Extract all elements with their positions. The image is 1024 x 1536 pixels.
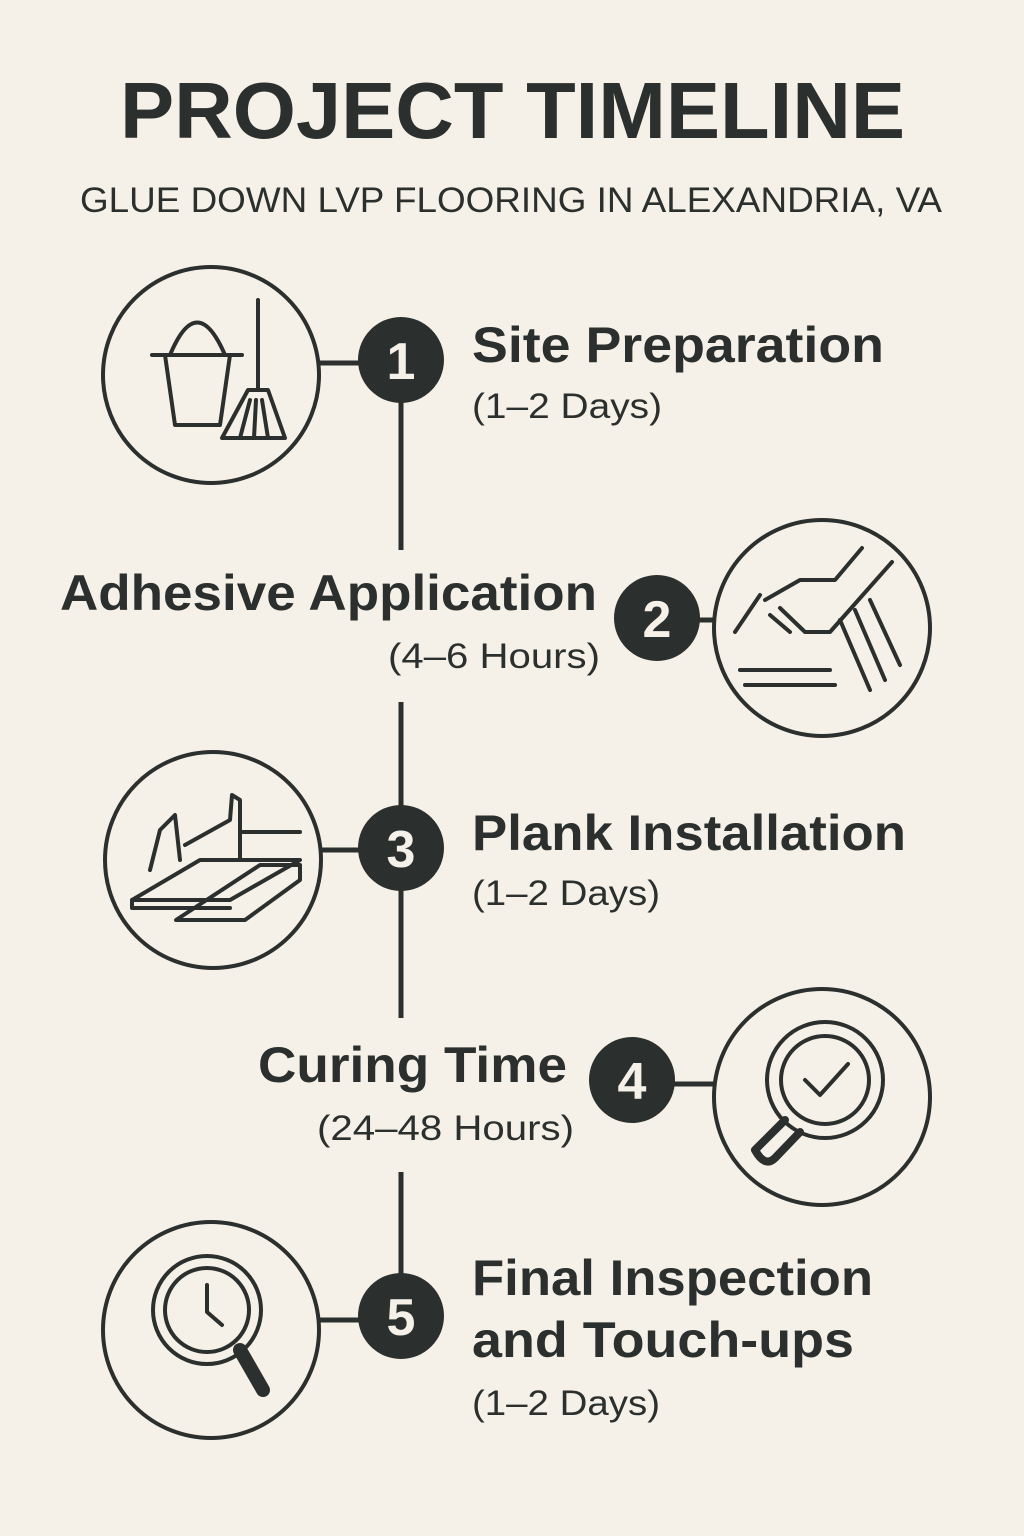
icon: magnifier with check — [714, 989, 930, 1205]
number badge 2 — [614, 575, 700, 661]
icon: plank installation — [105, 752, 321, 968]
step 5 text: (1–2 Days) — [472, 1384, 660, 1423]
number badge 4: 4 — [618, 1053, 647, 1111]
step 2 text: Adhesive Application — [60, 565, 597, 621]
number badge 4 — [589, 1037, 675, 1123]
step 5 text: and Touch-ups — [472, 1312, 854, 1368]
step 1 — [103, 267, 884, 483]
step 3 text: Plank Installation — [472, 805, 906, 861]
step 1 text: (1–2 Days) — [472, 387, 662, 426]
step 3 text: (1–2 Days) — [472, 874, 660, 913]
title: PROJECT TIMELINE — [120, 66, 905, 155]
step 5 text — [472, 1250, 873, 1423]
number badge 3: 3 — [387, 821, 415, 879]
number badge 3 — [358, 805, 444, 891]
step 3 — [105, 752, 906, 968]
number badge 1: 1 — [387, 333, 415, 391]
number badge 1 — [358, 317, 444, 403]
number badge 5 — [358, 1273, 444, 1359]
step 5 text: Final Inspection — [472, 1250, 873, 1306]
step 1 text: Site Preparation — [472, 317, 884, 373]
icon: hand spreading adhesive — [714, 520, 930, 736]
number badge 5: 5 — [387, 1289, 415, 1347]
step 2 — [60, 520, 930, 736]
number badge 2: 2 — [643, 591, 671, 649]
icon: magnifier with clock — [103, 1222, 319, 1438]
step 4 text: Curing Time — [258, 1037, 567, 1093]
step 4 text — [258, 1037, 574, 1148]
step 2 text — [60, 565, 600, 676]
step 1 text — [472, 317, 884, 426]
subtitle: GLUE DOWN LVP FLOORING IN ALEXANDRIA, VA — [80, 181, 943, 220]
icon: bucket and broom — [103, 267, 319, 483]
step 5 — [103, 1222, 873, 1438]
step 4 text: (24–48 Hours) — [317, 1109, 574, 1148]
step 2 text: (4–6 Hours) — [388, 637, 600, 676]
step 4 — [258, 989, 930, 1205]
step 3 text — [472, 805, 906, 913]
